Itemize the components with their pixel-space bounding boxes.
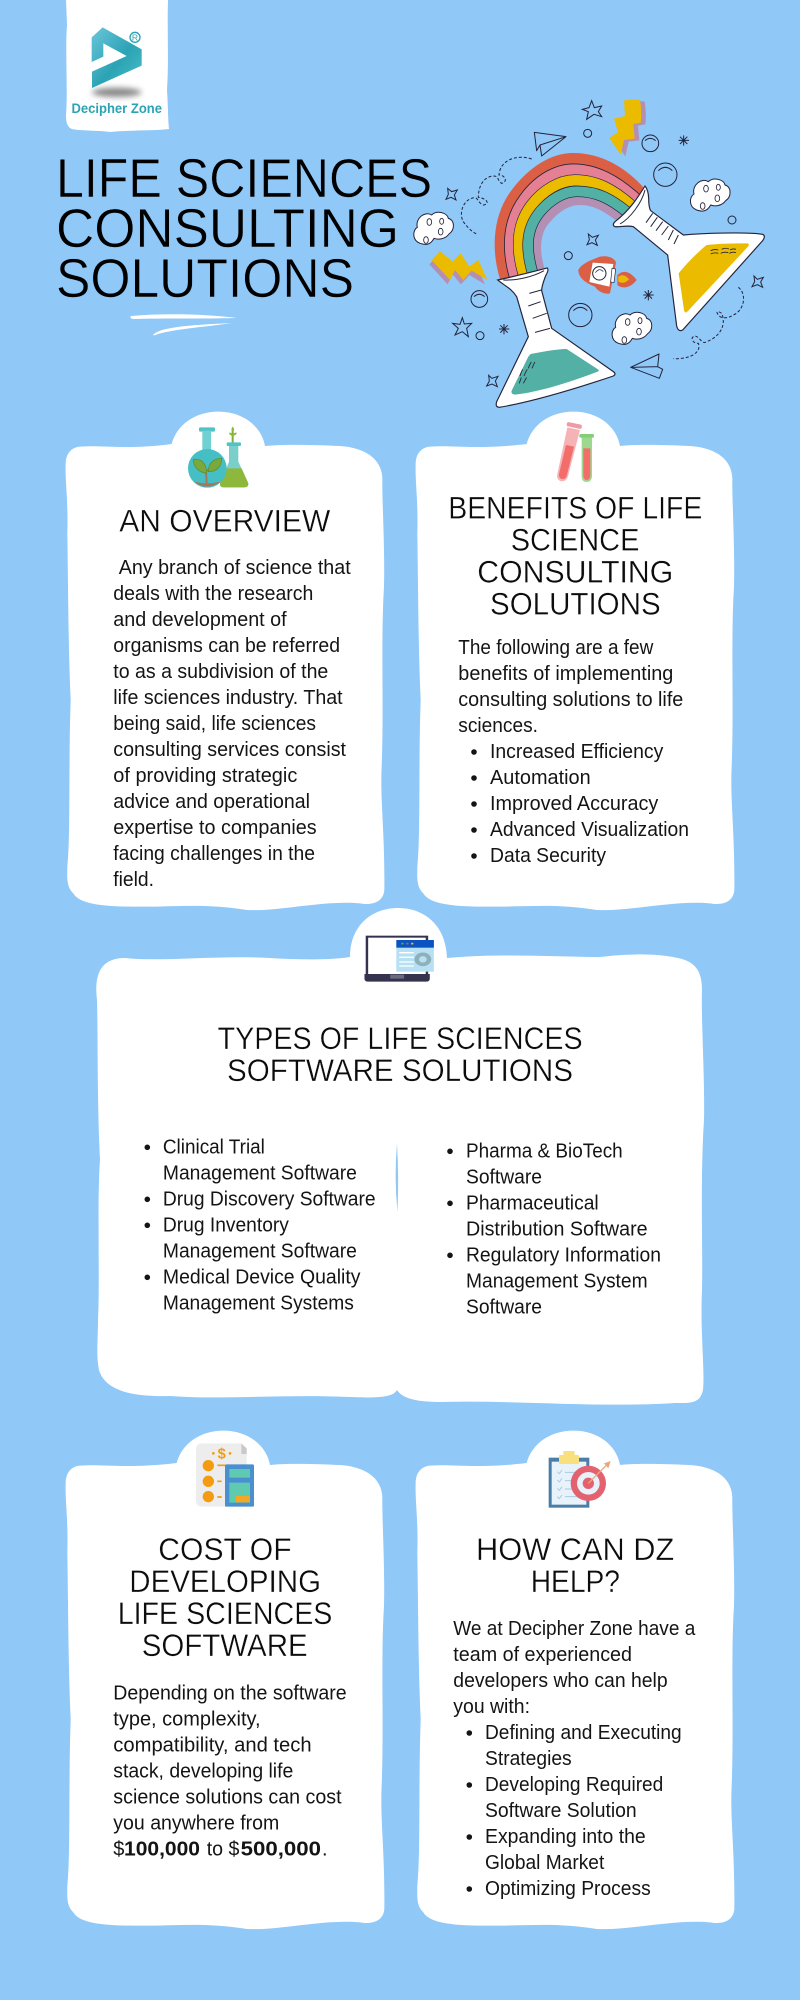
body text: Depending on the software [113, 1682, 347, 1704]
body text: you with: [453, 1696, 530, 1718]
bullet list: Strategies [485, 1748, 572, 1770]
body text [113, 1682, 347, 1860]
rainbow [501, 159, 641, 278]
body text: team of experienced [453, 1644, 632, 1666]
body text: 100,000 [124, 1838, 200, 1860]
right list: Distribution Software [466, 1218, 648, 1240]
body text [113, 557, 351, 891]
body text: organisms can be referred [113, 635, 340, 657]
panel: how can DZ help [416, 1431, 734, 1929]
title: LIFE SCIENCES [56, 147, 432, 209]
body text [453, 1618, 696, 1718]
bullet list: Increased Efficiency [490, 741, 663, 763]
body text: to as a subdivision of the [113, 661, 328, 683]
body text: deals with the research [113, 583, 313, 605]
left list [144, 1136, 376, 1314]
column seam [396, 1143, 398, 1212]
right list: Software [466, 1296, 542, 1318]
left list: Drug Discovery Software [163, 1188, 376, 1210]
bullet list: Expanding into the [485, 1826, 646, 1848]
heading [448, 489, 702, 621]
body text: compatibility, and tech [113, 1734, 312, 1756]
right list [447, 1140, 661, 1318]
bullet list: Automation [490, 767, 591, 789]
body text: We at Decipher Zone have a [453, 1618, 696, 1640]
panel: types of software [96, 908, 704, 1405]
heading: AN OVERVIEW [119, 503, 331, 539]
body text: facing challenges in the [113, 843, 315, 865]
body text: stack, developing life [113, 1760, 293, 1782]
icon: cost sheet and calculator: $ [218, 1447, 226, 1463]
logo card [66, 0, 169, 132]
left list: Clinical Trial [163, 1136, 265, 1158]
logo mark [92, 27, 142, 97]
illustration: rainbow and flasks [414, 99, 764, 407]
icon: flasks with plant [188, 427, 248, 488]
body text: type, complexity, [113, 1708, 261, 1730]
heading: SOFTWARE [142, 1627, 308, 1663]
sparkle stars [446, 101, 763, 387]
title: SOLUTIONS [56, 247, 354, 309]
heading: SOLUTIONS [490, 585, 661, 621]
bullet list: Data Security [490, 845, 606, 867]
body text: sciences. [458, 715, 538, 737]
body text: life sciences industry. That [113, 687, 343, 709]
icon: cost sheet and calculator [196, 1443, 254, 1507]
flask: green liquid [496, 268, 615, 407]
body text: developers who can help [453, 1670, 668, 1692]
title [56, 147, 432, 309]
heading: HELP? [531, 1563, 620, 1599]
body text: of providing strategic [113, 765, 297, 787]
bullet list: Improved Accuracy [490, 793, 658, 815]
heading [476, 1531, 674, 1599]
heading: DEVELOPING [129, 1563, 321, 1599]
heading: SCIENCE [511, 521, 639, 557]
clouds [414, 179, 730, 344]
body text: The following are a few [458, 637, 654, 659]
body text: expertise to companies [113, 817, 317, 839]
left list: Management Systems [163, 1292, 354, 1314]
logo wordmark: Decipher Zone [72, 101, 162, 116]
bullet list: Defining and Executing [485, 1722, 682, 1744]
body text [458, 637, 683, 737]
title underline strokes [130, 314, 237, 335]
bullet list [471, 741, 689, 867]
body text: advice and operational [113, 791, 310, 813]
icon: laptop with settings window [364, 937, 434, 982]
body text: benefits of implementing [458, 663, 673, 685]
bullet list: Developing Required [485, 1774, 663, 1796]
body text: Any branch of science that [119, 557, 351, 579]
paper planes [534, 132, 663, 378]
body text: to $ [207, 1838, 239, 1860]
bullet list: Advanced Visualization [490, 819, 689, 841]
heading [118, 1531, 332, 1663]
heading: COST OF [158, 1531, 292, 1567]
body text: science solutions can cost [113, 1786, 342, 1808]
dashed trails [461, 157, 744, 359]
left list: Drug Inventory [163, 1214, 289, 1236]
title: CONSULTING [56, 197, 399, 259]
heading: LIFE SCIENCES [118, 1595, 332, 1631]
heading: CONSULTING [477, 553, 673, 589]
body text: and development of [113, 609, 287, 631]
left list: Management Software [163, 1240, 357, 1262]
bullet list: Optimizing Process [485, 1878, 651, 1900]
right list: Regulatory Information [466, 1244, 661, 1266]
panel: overview [66, 412, 384, 910]
panel: benefits [416, 412, 734, 910]
logo registered mark: R [132, 32, 138, 42]
heading: TYPES OF LIFE SCIENCES [218, 1020, 583, 1056]
right list: Management System [466, 1270, 648, 1292]
right list: Pharma & BioTech [466, 1140, 623, 1162]
body text: being said, life sciences [113, 713, 316, 735]
panel: cost [66, 1431, 384, 1929]
bullet list: Global Market [485, 1852, 605, 1874]
right list: Pharmaceutical [466, 1192, 599, 1214]
bubbles [471, 129, 736, 340]
body text: you anywhere from [113, 1812, 279, 1834]
body text: field. [113, 869, 154, 891]
right list: Software [466, 1166, 542, 1188]
flask: yellow liquid [613, 186, 764, 331]
asterisks [499, 135, 689, 334]
heading: BENEFITS OF LIFE [448, 489, 702, 525]
body text: consulting services consist [113, 739, 346, 761]
bullet list: Software Solution [485, 1800, 637, 1822]
lightning bolts [429, 99, 646, 284]
heading: SOFTWARE SOLUTIONS [227, 1052, 573, 1088]
left list: Medical Device Quality [163, 1266, 360, 1288]
body text: . [322, 1838, 328, 1860]
rocket [578, 256, 637, 294]
heading [218, 1020, 583, 1088]
body text: $ [113, 1838, 124, 1860]
body text: 500,000 [241, 1838, 321, 1860]
icon: clipboard and target [549, 1451, 611, 1508]
icon: test tubes [557, 422, 594, 482]
heading: HOW CAN DZ [476, 1531, 674, 1567]
left list: Management Software [163, 1162, 357, 1184]
bullet list [466, 1722, 682, 1900]
body text: consulting solutions to life [458, 689, 683, 711]
